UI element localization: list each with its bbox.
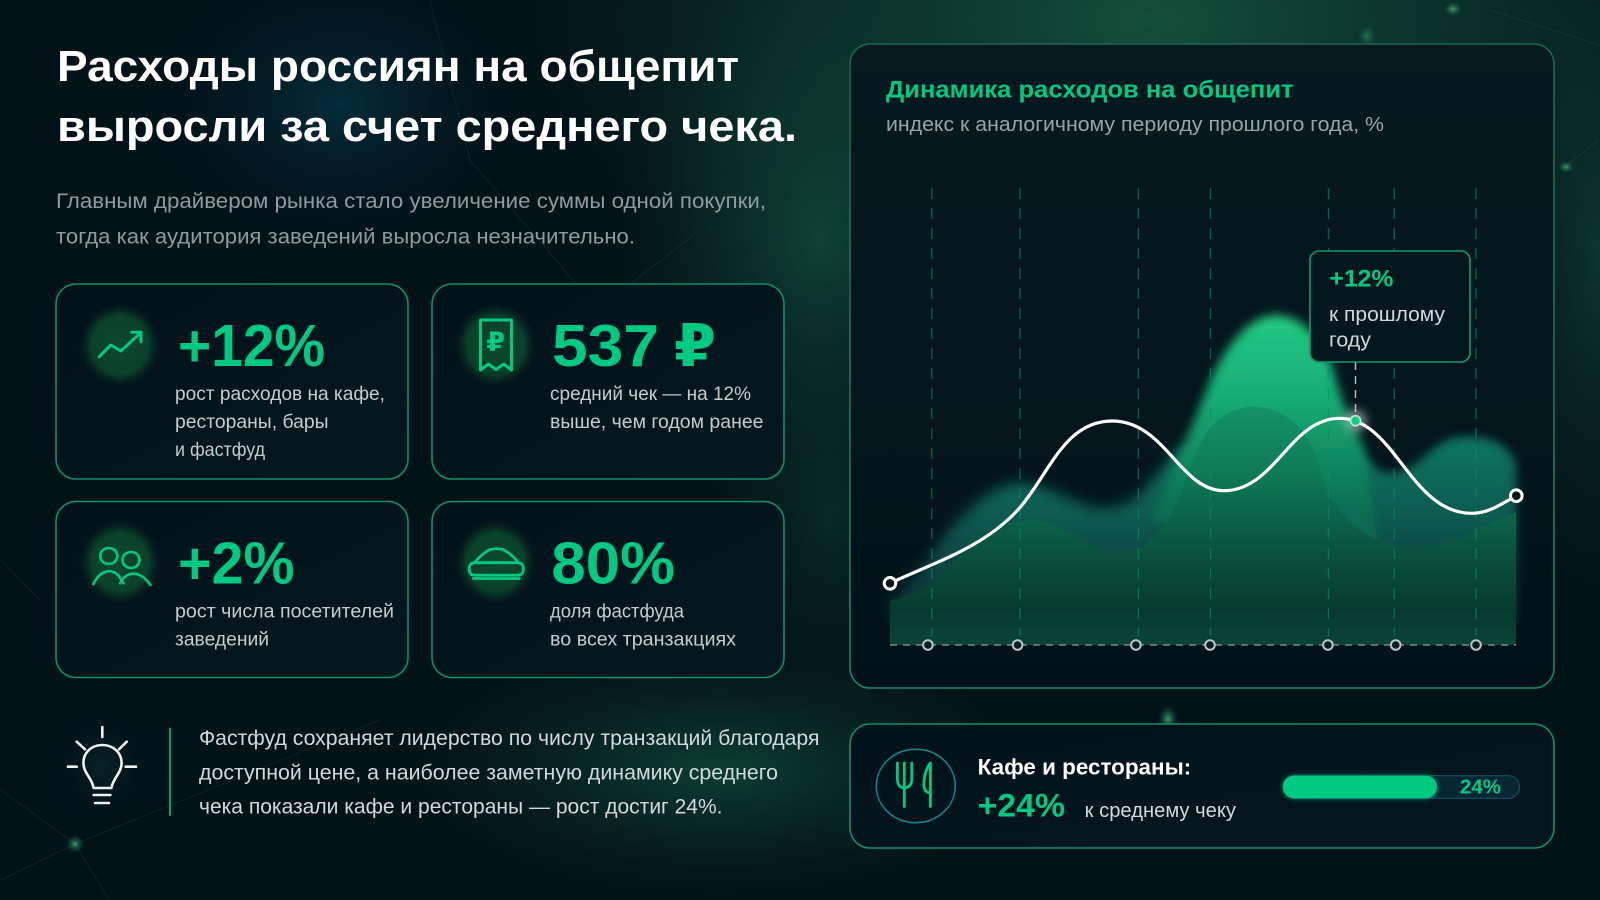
icon: receipt: ₽ (486, 327, 505, 357)
card: +12% spending (56, 284, 408, 479)
callout (1310, 251, 1470, 362)
title (57, 42, 797, 151)
insight text (199, 727, 819, 818)
stat: +12%: +12% (178, 313, 325, 379)
progress bar (1283, 776, 1520, 798)
chart subtitle: индекс к аналогичному периоду прошлого года, % (886, 114, 1384, 136)
leader line to callout (1354, 362, 1356, 418)
card description: рост расходов на кафе, (175, 383, 385, 405)
icon: trend arrow (79, 303, 161, 387)
card description (175, 383, 385, 461)
subtitle: тогда как аудитория заведений выросла незначительно. (56, 226, 635, 248)
stat: 537 rub (552, 313, 716, 379)
card description: заведений (175, 628, 269, 650)
stat: 537 rub: ₽ (674, 313, 716, 379)
callout: +12% (1329, 266, 1393, 293)
insight divider (169, 728, 171, 816)
card: 537 rub average check (432, 284, 784, 479)
line endpoints (884, 490, 1522, 589)
card description (550, 601, 736, 650)
card: 80% fast food (432, 502, 784, 678)
icon: receipt (455, 303, 537, 387)
stat: 537 rub: 537 (552, 313, 659, 379)
insight text: Фастфуд сохраняет лидерство по числу транзакций благодаря (199, 727, 819, 750)
stat: +2%: +2% (178, 530, 294, 596)
card description (550, 383, 764, 433)
card description (175, 601, 394, 650)
panel: cafes and restaurants (850, 724, 1554, 848)
x axis with markers (890, 640, 1516, 650)
grid lines (932, 188, 1476, 636)
trend line (890, 418, 1516, 583)
subtitle (56, 190, 766, 248)
card description: во всех транзакциях (550, 628, 736, 650)
callout: к прошлому (1329, 304, 1445, 326)
progress bar: 24% (1460, 776, 1501, 798)
icon: light bulb (54, 714, 150, 818)
callout: году (1329, 330, 1371, 352)
area chart (890, 315, 1516, 645)
panel: spending dynamics chart (850, 44, 1554, 688)
insight text: чека показали кафе и рестораны — рост достиг 24%. (199, 795, 722, 818)
title: Расходы россиян на общепит (57, 42, 739, 91)
title: выросли за счет среднего чека. (57, 102, 797, 151)
insight text: доступной цене, а наиболее заметную динамику среднего (199, 761, 778, 784)
highlighted point (1344, 410, 1366, 432)
icon: burger bun (455, 520, 537, 604)
panel heading: Кафе и рестораны: (978, 754, 1191, 779)
icon: fork and knife (876, 749, 955, 823)
card description: рестораны, бары (175, 411, 328, 433)
stat caption: к среднему чеку (1085, 800, 1236, 822)
card description: средний чек — на 12% (550, 383, 751, 405)
icon: people (79, 520, 161, 604)
subtitle: Главным драйвером рынка стало увеличение суммы одной покупки, (56, 190, 766, 213)
stat: +24%: +24% (978, 788, 1065, 824)
card: +2% visitors (56, 502, 408, 678)
stat: 80%: 80% (551, 530, 675, 596)
chart heading: Динамика расходов на общепит (886, 77, 1294, 104)
card description: рост числа посетителей (175, 601, 394, 623)
card description: доля фастфуда (550, 601, 684, 623)
card description: выше, чем годом ранее (550, 411, 764, 433)
card description: и фастфуд (175, 439, 266, 461)
